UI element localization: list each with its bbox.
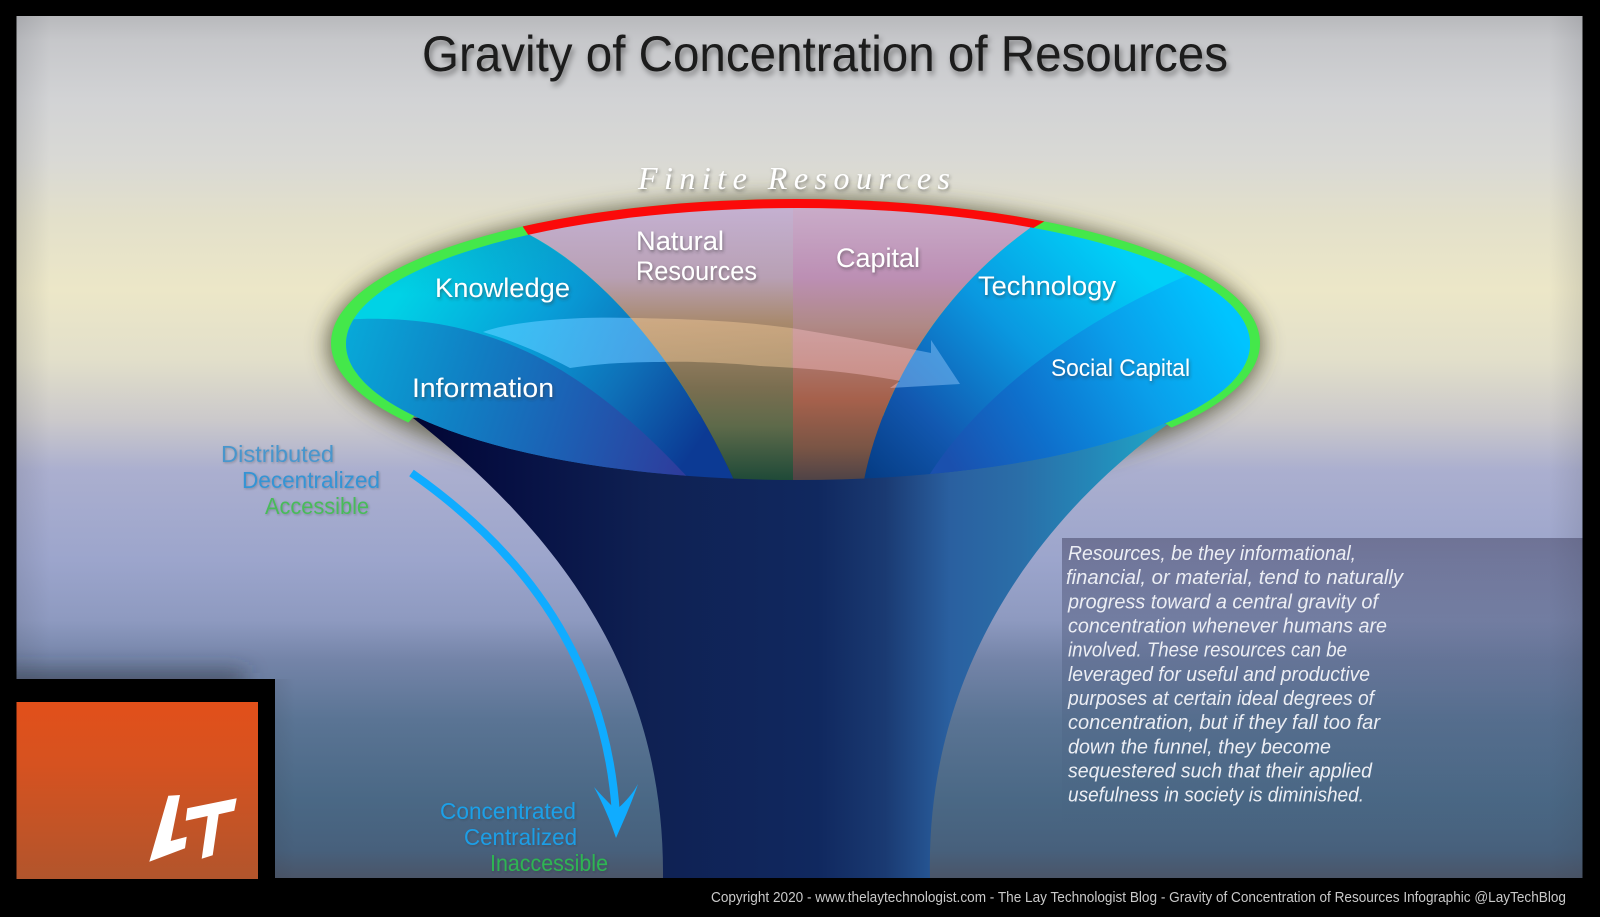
heading: finite resources: Finite Resources	[637, 160, 950, 196]
label: social capital: Social Capital	[1051, 355, 1190, 382]
labels: concentrated, centralized, inaccessible: Concentrated	[440, 798, 576, 824]
funnel rim: finite red arc	[522, 199, 1044, 236]
labels: concentrated, centralized, inaccessible: Centralized	[464, 824, 577, 850]
funnel opening interior	[346, 208, 1250, 480]
labels: distributed, decentralized, accessible: Accessible	[265, 493, 369, 519]
note text: concentration, but if they fall too far	[1068, 711, 1381, 734]
labels: concentrated, centralized, inaccessible	[440, 798, 608, 876]
labels: distributed, decentralized, accessible: Distributed	[221, 441, 334, 467]
note text	[1066, 542, 1405, 807]
label: natural resources	[636, 226, 757, 286]
labels: distributed, decentralized, accessible	[221, 441, 380, 519]
capital segment	[793, 180, 1030, 480]
note background	[1062, 538, 1582, 830]
note text: sequestered such that their applied	[1068, 760, 1373, 782]
funnel rim: accessible green arcs	[331, 199, 1260, 428]
panel: explanatory note	[1062, 538, 1582, 830]
knowledge segment	[346, 234, 733, 478]
funnel diagram	[300, 180, 1300, 878]
note text: financial, or material, tend to naturally	[1066, 566, 1405, 589]
labels: distributed, decentralized, accessible: Decentralized	[242, 467, 380, 493]
label: information: Information	[412, 373, 554, 403]
logo: LT orange square	[16, 702, 258, 879]
arrow: gravity downward curve	[412, 473, 638, 838]
note text: purposes at certain ideal degrees of	[1067, 687, 1376, 710]
note text: Resources, be they informational,	[1068, 542, 1356, 565]
translucent arrow over blue segments	[483, 318, 960, 388]
note text: leveraged for useful and productive	[1068, 663, 1370, 686]
knowledge top shading	[410, 234, 568, 276]
footer copyright line: Copyright 2020 - www.thelaytechnologist.com - The Lay Technologist Blog - Gravity of Concentration of Resources Infographic @LayTechBlog	[711, 890, 1566, 906]
translucent arrow over central segments	[631, 318, 916, 388]
label: capital: Capital	[836, 243, 920, 273]
technology segment	[864, 227, 1250, 478]
note text: involved. These resources can be	[1068, 639, 1347, 662]
funnel rim glow	[327, 197, 1263, 493]
title: Gravity of Concentration of Resources	[422, 26, 1228, 82]
note text: down the funnel, they become	[1068, 735, 1331, 758]
natural resources segment	[529, 208, 793, 480]
label: natural resources: Resources	[636, 256, 757, 286]
note text: concentration whenever humans are	[1068, 614, 1387, 638]
information segment	[346, 318, 686, 476]
note text: usefulness in society is diminished.	[1068, 784, 1364, 807]
label: knowledge: Knowledge	[435, 273, 570, 303]
labels: concentrated, centralized, inaccessible: Inaccessible	[490, 850, 608, 876]
label: natural resources: Natural	[636, 226, 724, 256]
label: technology: Technology	[978, 271, 1116, 301]
funnel body	[413, 400, 1168, 878]
social capital segment	[930, 275, 1250, 474]
note text: progress toward a central gravity of	[1067, 590, 1380, 613]
